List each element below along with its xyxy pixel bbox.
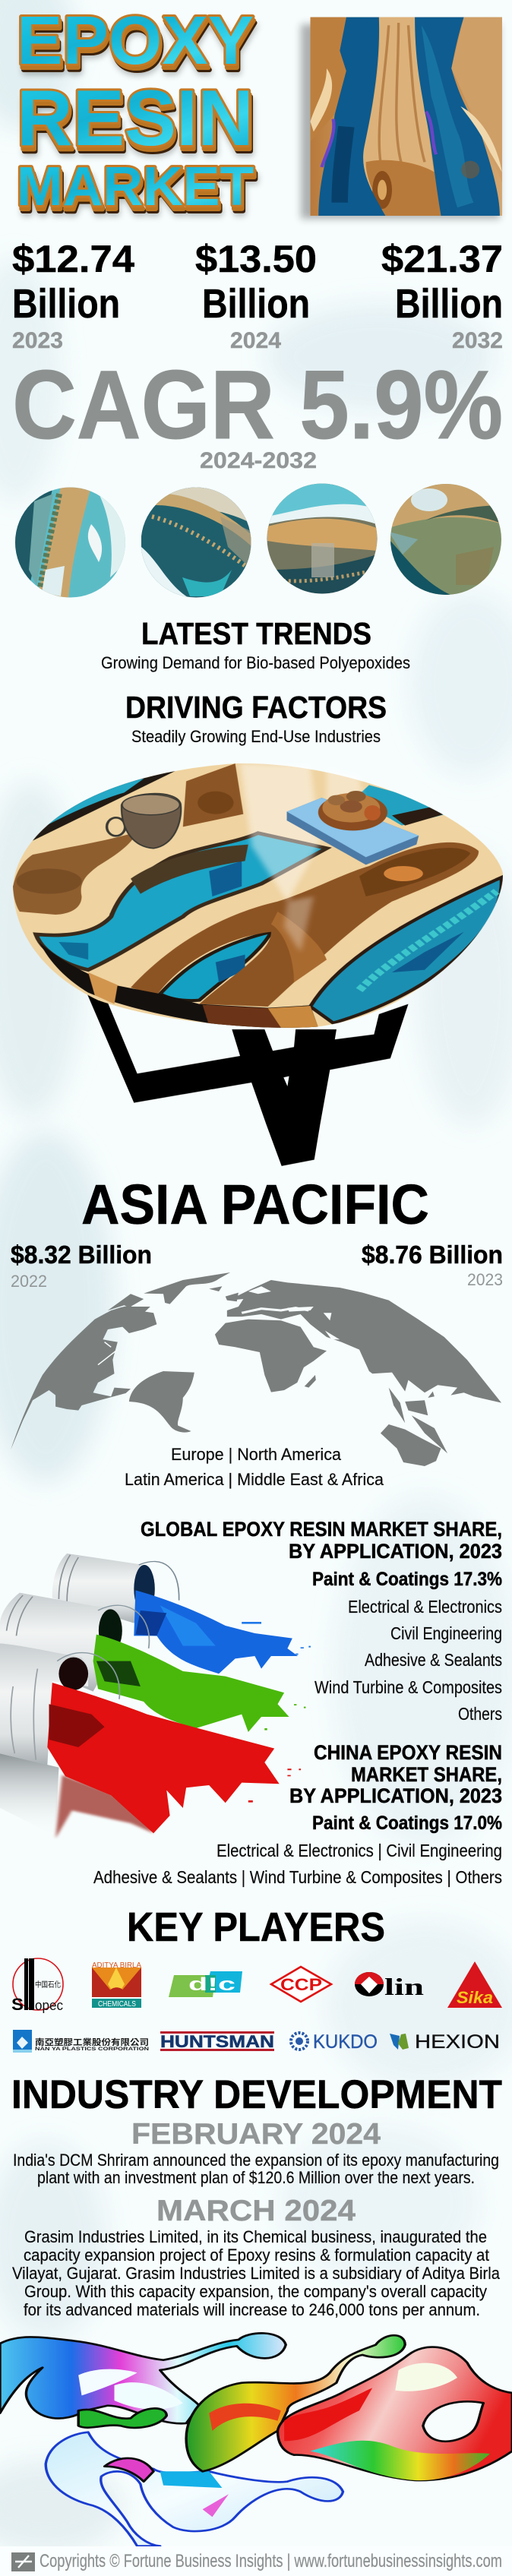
- stat: 2024 value: [195, 238, 317, 353]
- heading: global share: BY APPLICATION, 2023: [289, 1540, 502, 1563]
- subheading: February 2024: FEBRUARY 2024: [131, 2118, 381, 2151]
- illustration: paint cans: [0, 1554, 311, 1838]
- resin circle 3: [266, 483, 378, 596]
- stat: 2024 value: 2024: [230, 328, 281, 353]
- rainbow centre: [186, 2335, 405, 2471]
- logo: Nan Ya Plastics: [13, 2030, 149, 2053]
- stat: 2023 value: $12.74: [12, 238, 134, 280]
- list: global applications: Others: [458, 1704, 502, 1724]
- blue paint: [134, 1590, 298, 1674]
- text: latest trend: Growing Demand for Bio-based Polyepoxides: [101, 653, 410, 672]
- logo: Nan Ya Plastics: 南亞塑膠工業股份有限公司: [35, 2037, 149, 2047]
- heading: key players: KEY PLAYERS: [127, 1904, 385, 1950]
- table top: [10, 760, 506, 1033]
- text: March development: [12, 2227, 501, 2319]
- heading: Asia Pacific: ASIA PACIFIC: [81, 1173, 429, 1236]
- resin circle 4: [389, 483, 503, 597]
- bowl of nuts: [318, 794, 387, 830]
- seas: [242, 1308, 308, 1313]
- resin circle 1: [15, 486, 126, 600]
- stat: 2023 region value: [362, 1241, 503, 1289]
- logo: DIC: d!c: [188, 1974, 235, 1995]
- logo: Fortune Business Insights: [11, 2552, 35, 2571]
- logo: Sinopec: S: [11, 1995, 24, 2014]
- North America: [11, 1306, 156, 1449]
- Arctic islands: [88, 1294, 150, 1332]
- stat: 2032 value: 2032: [452, 328, 503, 353]
- logo: Nan Ya Plastics: NAN YA PLASTICS CORPORATION: [35, 2047, 149, 2052]
- blue magenta stream: [0, 2333, 286, 2423]
- table legs: [87, 993, 408, 1166]
- green paint: [93, 1635, 289, 1732]
- logo: DIC: [169, 1971, 242, 1997]
- world map: [11, 1272, 501, 1466]
- stat: 2022 region value: 2022: [11, 1272, 47, 1291]
- logo: Olin: lin: [384, 1973, 424, 2000]
- list: other regions: [125, 1445, 384, 1489]
- stat: 2023 region value: 2023: [467, 1270, 503, 1289]
- logo: Huntsman: HUNTSMAN: [160, 2032, 274, 2051]
- logo: Hexion: [390, 2031, 500, 2053]
- red paint: [47, 1683, 280, 1833]
- photo: resin river slab: [301, 17, 502, 219]
- subheading: March 2024: MARCH 2024: [156, 2195, 356, 2227]
- Madagascar: [305, 1375, 316, 1388]
- green stream: [78, 2408, 166, 2428]
- blue can: [52, 1554, 153, 1623]
- stat: 2023 value: 2023: [12, 328, 63, 353]
- illustration: liquid colour swirl: [0, 2333, 512, 2546]
- green can: [0, 1593, 122, 1692]
- text: March development: capacity expansion project of Epoxy resins & formulation capacity at: [24, 2246, 489, 2265]
- text: February development: [13, 2151, 499, 2187]
- red rainbow tail: [278, 2347, 512, 2480]
- logo: Sika: Sika: [457, 1988, 493, 2007]
- list: China applications: [93, 1841, 502, 1887]
- stat: 2023 region value: $8.76 Billion: [362, 1241, 503, 1269]
- heading: global share: [141, 1518, 502, 1563]
- text: driving factor: Steadily Growing End-Use Industries: [131, 727, 381, 746]
- logo: CCP: CCP: [280, 1975, 322, 1994]
- text: March development: for its advanced materials will increase to 246,000 tons per annum.: [24, 2300, 480, 2319]
- stat: 2023 value: Billion: [12, 281, 120, 327]
- Eurasia: [227, 1280, 501, 1403]
- red can: [0, 1643, 88, 1765]
- logo: Kukdo: KUKDO: [313, 2031, 378, 2053]
- title: MARKET: [17, 156, 254, 217]
- title: RESIN: [17, 74, 254, 163]
- illustration: resin river table: [10, 760, 506, 1166]
- logo: Sinopec: opec: [35, 1998, 63, 2013]
- resin circle 2: [141, 486, 252, 599]
- heading: China share: [289, 1741, 502, 1807]
- list: other regions: Latin America | Middle East & Africa: [125, 1470, 384, 1489]
- list: other regions: Europe | North America: [171, 1445, 342, 1464]
- list: global applications: [314, 1597, 502, 1724]
- CAGR period: 2024-2032: [200, 448, 317, 473]
- heading: China share: BY APPLICATION, 2023: [289, 1784, 502, 1807]
- Greenland: [144, 1272, 230, 1304]
- glare streaks: [240, 763, 366, 952]
- stat: 2024 value: Billion: [202, 281, 310, 327]
- logo: Olin: [355, 1972, 424, 2000]
- stat: 2022 region value: $8.32 Billion: [11, 1241, 152, 1269]
- title: [17, 3, 254, 217]
- logo: CCP: [271, 1967, 331, 2002]
- stat: 2032 value: [381, 238, 503, 353]
- stat: 2032 value: $21.37: [381, 238, 503, 280]
- stat: 2024 value: $13.50: [195, 238, 317, 280]
- title: EPOXY: [17, 3, 254, 79]
- stat: 2022 region value: [11, 1241, 152, 1291]
- book: [287, 798, 419, 864]
- Iceland and Britain: [209, 1286, 239, 1301]
- heading: driving factors: DRIVING FACTORS: [125, 690, 387, 725]
- South America: [129, 1371, 194, 1433]
- Africa: [215, 1320, 327, 1392]
- can reflection: [0, 1753, 58, 1836]
- glass cup: [107, 817, 125, 836]
- logo: Aditya Birla Chemicals: ADITYA BIRLA: [92, 1961, 141, 1970]
- logo: Sinopec: 中国石化: [35, 1980, 61, 1990]
- logo: Aditya Birla Chemicals: [92, 1961, 141, 2009]
- South East Asia islands: [389, 1388, 447, 1453]
- logo: Aditya Birla Chemicals: CHEMICALS: [98, 2000, 136, 2009]
- Australia: [381, 1424, 441, 1466]
- heading: latest trends: LATEST TRENDS: [141, 616, 371, 651]
- pale lower stream: [46, 2432, 343, 2546]
- logo: Sika: [447, 1961, 502, 2008]
- logo: Sinopec: [11, 1958, 63, 2014]
- stat: 2023 value: [12, 238, 134, 353]
- footer band: [0, 2546, 512, 2576]
- logo: Hexion: HEXION: [415, 2031, 500, 2053]
